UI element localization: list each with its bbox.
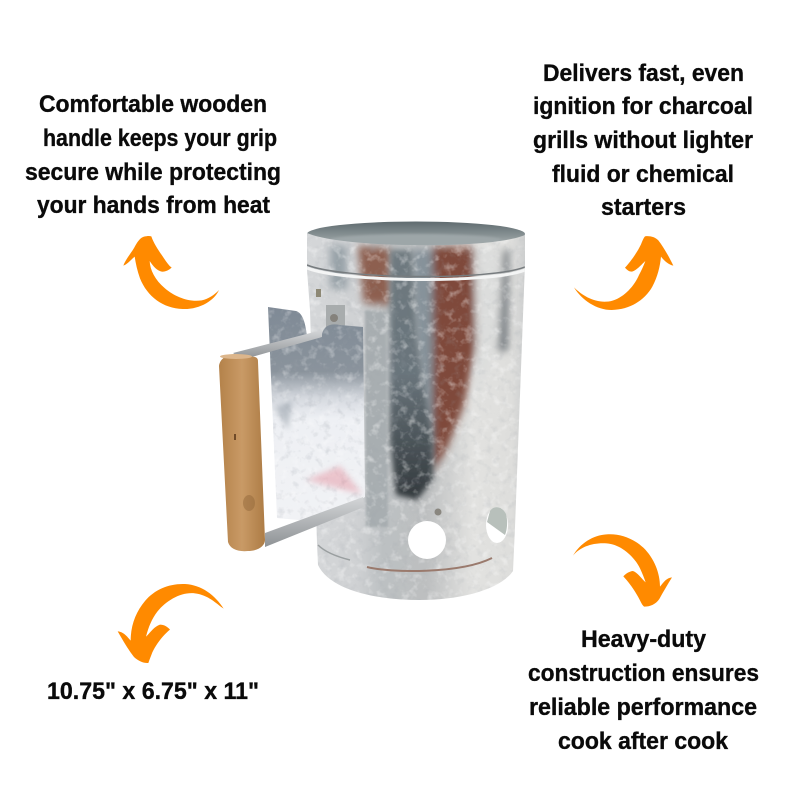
text: fast ignition callout: starters: [601, 194, 686, 221]
icon: orange arrow pointing up-left: [123, 236, 219, 309]
handle bracket: lower arm: [265, 497, 364, 547]
text: wooden handle callout: Comfortable wooden: [39, 91, 267, 118]
text: heavy-duty callout: reliable performance: [529, 694, 757, 721]
text: heavy-duty callout: Heavy-duty: [581, 626, 707, 653]
heat-shield plate: [268, 307, 365, 522]
icon: orange arrow pointing up-right: [574, 236, 673, 310]
text: wooden handle callout: secure while protecting: [25, 159, 281, 186]
text: wooden handle callout: handle keeps your grip: [43, 125, 277, 152]
chimney starter product: [219, 222, 530, 605]
icon: orange arrow pointing down-right: [573, 534, 672, 607]
hole: front vent: [408, 521, 446, 559]
text: heavy-duty callout: construction ensures: [528, 660, 759, 687]
chimney inner rim: [307, 222, 525, 246]
text: heavy-duty callout: cook after cook: [558, 728, 729, 755]
text: wooden handle callout: your hands from heat: [37, 192, 270, 219]
text: heavy-duty callout: [528, 626, 759, 755]
text: fast ignition callout: grills without lighter: [533, 127, 753, 154]
handle bracket: upper arm: [233, 330, 322, 359]
rivet: [434, 508, 442, 516]
text: fast ignition callout: ignition for charcoal: [533, 93, 753, 120]
text: fast ignition callout: Delivers fast, even: [543, 60, 744, 87]
hole: side vent: [486, 507, 508, 543]
side strip: [365, 310, 388, 527]
text: fast ignition callout: fluid or chemical: [552, 161, 734, 188]
text: wooden handle callout: [25, 91, 281, 219]
wooden handle: [219, 354, 265, 551]
text: fast ignition callout: [533, 60, 753, 221]
chimney body: [300, 225, 530, 605]
bracket tab and rivets: [316, 289, 345, 327]
icon: orange arrow pointing down-left: [118, 584, 224, 663]
text: dimensions callout: 10.75" x 6.75" x 11": [47, 678, 259, 705]
